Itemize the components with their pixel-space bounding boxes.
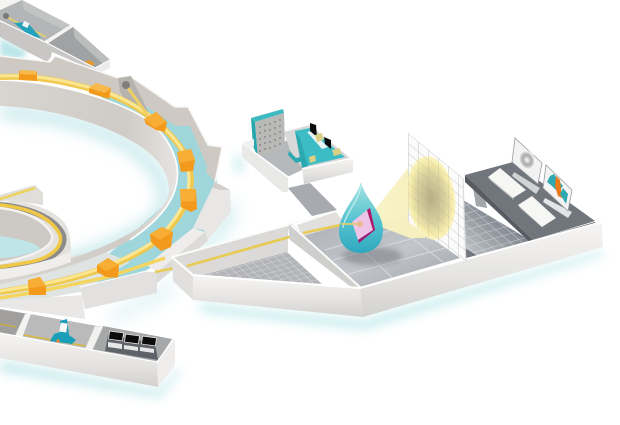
teal perforated panel [251,109,285,158]
dividers [15,314,31,338]
beam to hall [187,236,293,266]
left room floor [203,252,323,285]
room back wall 2 [22,314,95,349]
right side wall [157,339,175,387]
block 1 [19,70,37,81]
inner wall [0,208,52,263]
keyboard 1 [488,168,526,200]
lab floor [254,140,352,178]
monitor 2 [543,165,572,218]
outer curved wall [0,200,71,277]
inner injector ring [0,185,71,280]
ring floor [0,96,218,306]
room 2 interior [47,27,110,69]
detector panel [401,133,466,262]
outer ring wall lower [0,271,157,319]
droplet shadow [342,247,402,265]
teal desk with monitors [288,123,345,168]
outer ring wall upper [0,56,222,182]
block 7 [97,258,119,278]
back wall middle room [297,212,345,237]
water droplet [339,182,383,253]
left wall [242,143,288,192]
back wall [284,125,350,168]
upper middle lab room [242,109,353,216]
divider wall [288,224,360,288]
monitor 1 [512,138,542,194]
central curved ring wall [0,80,177,284]
front wall [0,333,158,387]
top linac stub [0,185,43,205]
interior rooms [0,309,172,362]
front wall [172,257,193,300]
beam in middle room [303,224,345,233]
block 2 [89,83,111,99]
block 3 [144,112,167,132]
main beamline hall [155,138,603,317]
dividing walls [43,25,73,44]
magnet blocks [19,70,197,295]
block 5 [180,189,197,212]
grey platform with keyboards and monitors [465,138,596,245]
middle room floor [303,218,460,287]
beam line ring [0,76,191,298]
keyboard 2 [518,196,556,229]
corridor [288,183,337,216]
beam branch to left [0,258,165,298]
x-ray cone [373,163,428,238]
crystal [352,208,375,243]
top-left building [0,0,110,73]
right wall [302,158,353,184]
small beam and instrument [3,13,95,67]
block 8 [28,277,46,295]
room back wall 3 [90,326,172,361]
tangential beam [128,88,148,116]
outer ring wall right corner [147,182,231,283]
back wall left room [172,225,288,275]
inner void [0,236,40,258]
dark gutter [0,205,63,268]
room back wall 1 [0,310,25,335]
beam and teal sample stage [0,319,85,346]
block 6 [150,227,173,251]
front wall [0,21,100,73]
block 4 [177,149,195,172]
yellow booster beam [0,205,60,267]
room 1 interior [0,0,70,42]
lower-left building [0,309,175,387]
right room floor [463,200,533,258]
floor tile lines [323,225,445,285]
incoming beam [341,223,358,225]
black monitors and desk [105,331,158,360]
